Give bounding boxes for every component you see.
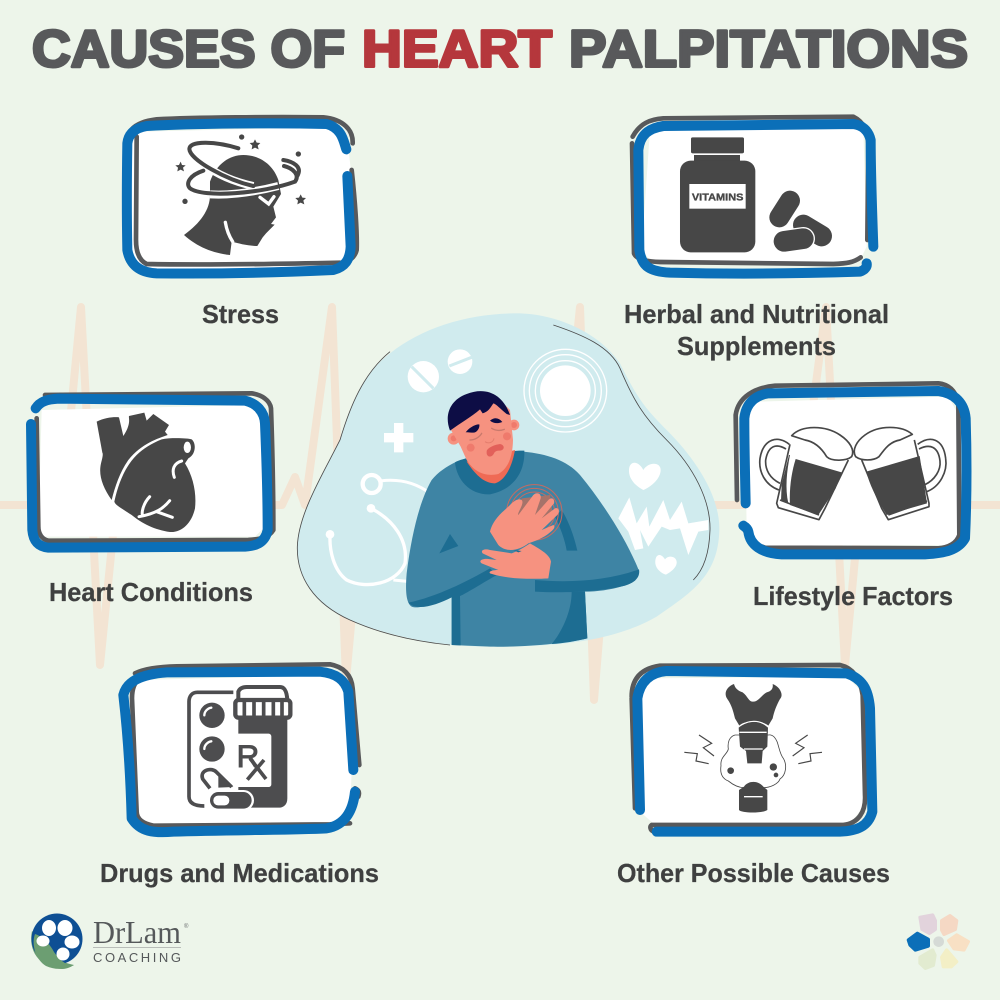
central illustration: man holding chest: [297, 313, 719, 647]
label: Stress: Stress: [202, 299, 279, 329]
chest pain rings: [507, 485, 562, 540]
decorative flower mark: [908, 915, 968, 968]
title: PALPITATIONS: [569, 20, 968, 78]
panel: stress: [127, 117, 357, 274]
icon: vitamins bottle and pills: VITAMINS: [692, 192, 744, 203]
label: Other Possible Causes: Other Possible Causes: [617, 858, 890, 888]
icon: thyroid and trachea: [684, 684, 822, 812]
panel: lifestyle factors: [736, 383, 966, 554]
icon: vitamins bottle and pills: [680, 137, 822, 252]
panel: heart conditions: [31, 393, 273, 548]
logo: DrLam Coaching: DrLam: [93, 914, 181, 950]
man: [406, 391, 639, 647]
hands: [480, 493, 559, 579]
title: HEART: [362, 20, 552, 78]
label: Herbal and Nutritional Supplements: Herbal and Nutritional: [624, 299, 889, 329]
ears and face: [448, 433, 460, 445]
panel: other possible causes: [632, 665, 872, 832]
logo: DrLam Coaching: ®: [184, 923, 189, 930]
logo mark: [31, 914, 82, 969]
icon: clinking beer mugs: [760, 427, 946, 520]
label: Heart Conditions: Heart Conditions: [49, 577, 253, 607]
background ECG line: [0, 307, 1000, 700]
icon: prescription bottle and pills: R: [237, 739, 259, 774]
label: Herbal and Nutritional Supplements: [624, 299, 889, 361]
label: Lifestyle Factors: Lifestyle Factors: [753, 581, 953, 611]
icon: prescription bottle and pills: [189, 687, 290, 811]
panel: drugs and medications: [123, 664, 359, 832]
logo: DrLam Coaching: COACHING: [93, 950, 181, 965]
icon: anatomical heart: [97, 413, 195, 532]
title: CAUSES OF: [32, 20, 345, 78]
logo: DrLam Coaching: [31, 914, 189, 969]
blob background: [297, 313, 719, 647]
label: Drugs and Medications: Drugs and Medications: [100, 858, 379, 888]
medical symbols: [326, 349, 708, 585]
neck: [467, 450, 515, 483]
title: [32, 20, 968, 78]
panel: herbal and nutritional supplements: [632, 117, 873, 274]
label: Herbal and Nutritional Supplements: Supplements: [677, 331, 836, 361]
icon: dizzy head: [175, 134, 306, 255]
